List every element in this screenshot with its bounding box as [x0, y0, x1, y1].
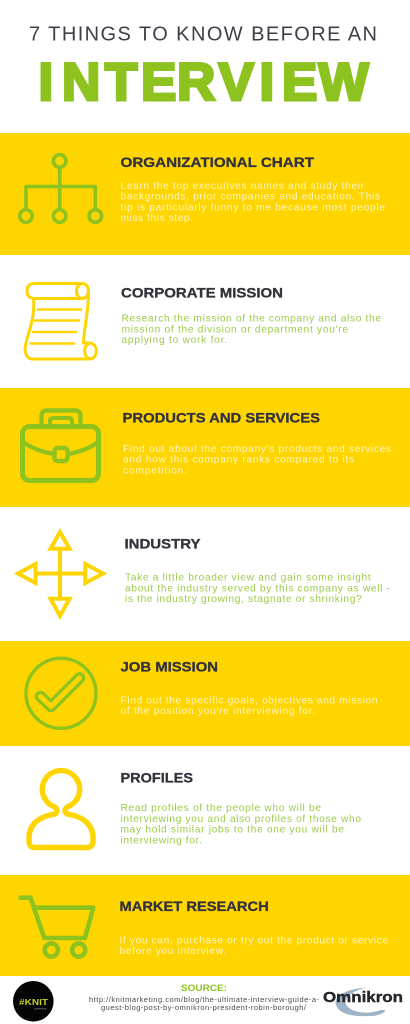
description: applying to work for. — [122, 335, 227, 346]
panel: products and services — [0, 388, 410, 507]
icon: four-way arrows — [18, 532, 103, 616]
panel: organizational chart — [0, 133, 410, 255]
icon: person outline — [29, 771, 93, 848]
panel: industry — [18, 532, 390, 616]
heading: MARKET RESEARCH — [120, 899, 269, 914]
logo: Omnikron — [323, 988, 403, 1016]
title: INTERVIEW: INTERVIEW — [38, 53, 369, 112]
heading: PRODUCTS AND SERVICES — [122, 410, 320, 425]
heading: JOB MISSION — [120, 659, 218, 674]
description: competition. — [123, 466, 187, 477]
panel: profiles — [29, 770, 361, 848]
source url — [89, 995, 320, 1012]
icon: check mark in circle — [26, 658, 96, 728]
logo: #KNIT marketing — [13, 981, 54, 1022]
description — [125, 573, 390, 605]
description — [120, 803, 361, 846]
description: mission of the division or department you're — [122, 324, 348, 335]
description: miss this step. — [120, 213, 193, 224]
description: may hold similar jobs to the one you will be — [120, 825, 344, 836]
description: interviewing for. — [120, 835, 202, 846]
heading: INDUSTRY — [124, 537, 200, 552]
description: Read profiles of the people who will be — [120, 803, 321, 814]
description: If you can, purchase or try out the product or service — [120, 935, 388, 946]
heading: CORPORATE MISSION — [121, 285, 283, 300]
icon: scroll — [25, 284, 96, 359]
heading: PROFILES — [120, 770, 193, 785]
description: and how this company ranks compared to its — [123, 455, 354, 466]
description: backgrounds, prior companies and education. This — [120, 192, 380, 203]
description: before you interview. — [120, 946, 226, 957]
title line: 7 THINGS TO KNOW BEFORE AN — [29, 24, 377, 46]
description: about the industry served by this company as well - — [125, 583, 390, 594]
panel: market research — [0, 875, 410, 976]
description: Find out the specific goals, objectives and mission — [120, 695, 378, 706]
source citation — [89, 983, 320, 1012]
source label: SOURCE: — [181, 983, 227, 994]
heading: ORGANIZATIONAL CHART — [120, 155, 315, 170]
description — [123, 444, 391, 477]
description: is the industry growing, stagnate or shrinking? — [125, 594, 362, 605]
description — [120, 935, 388, 957]
source url: guest-blog-post-by-omnikron-president-robin-borough/ — [101, 1003, 307, 1012]
logo: #KNIT marketing: #KNIT — [19, 997, 49, 1007]
icon: briefcase — [22, 410, 98, 480]
description — [122, 314, 381, 346]
description — [120, 695, 378, 717]
description: Find out about the company's products and services — [123, 444, 391, 455]
description: tip is particularly funny to me because most people — [120, 202, 385, 214]
description: interviewing you and also profiles of those who — [120, 814, 361, 825]
source url: http://knitmarketing.com/blog/the-ultimate-interview-guide-a- — [89, 995, 320, 1004]
panel: job mission — [0, 641, 410, 746]
logo: #KNIT marketing: marketing — [34, 1006, 47, 1010]
description: of the position you're interviewing for. — [120, 706, 315, 717]
description: Research the mission of the company and also the — [122, 314, 381, 325]
icon: shopping cart — [20, 898, 93, 957]
description: Learn the top executives names and study their — [120, 181, 365, 192]
description: Take a little broader view and gain some insight — [125, 573, 371, 584]
logo: Omnikron: Omnikron — [323, 989, 403, 1006]
panel: corporate mission — [25, 284, 381, 359]
icon: org chart — [20, 155, 102, 222]
description — [120, 181, 385, 224]
